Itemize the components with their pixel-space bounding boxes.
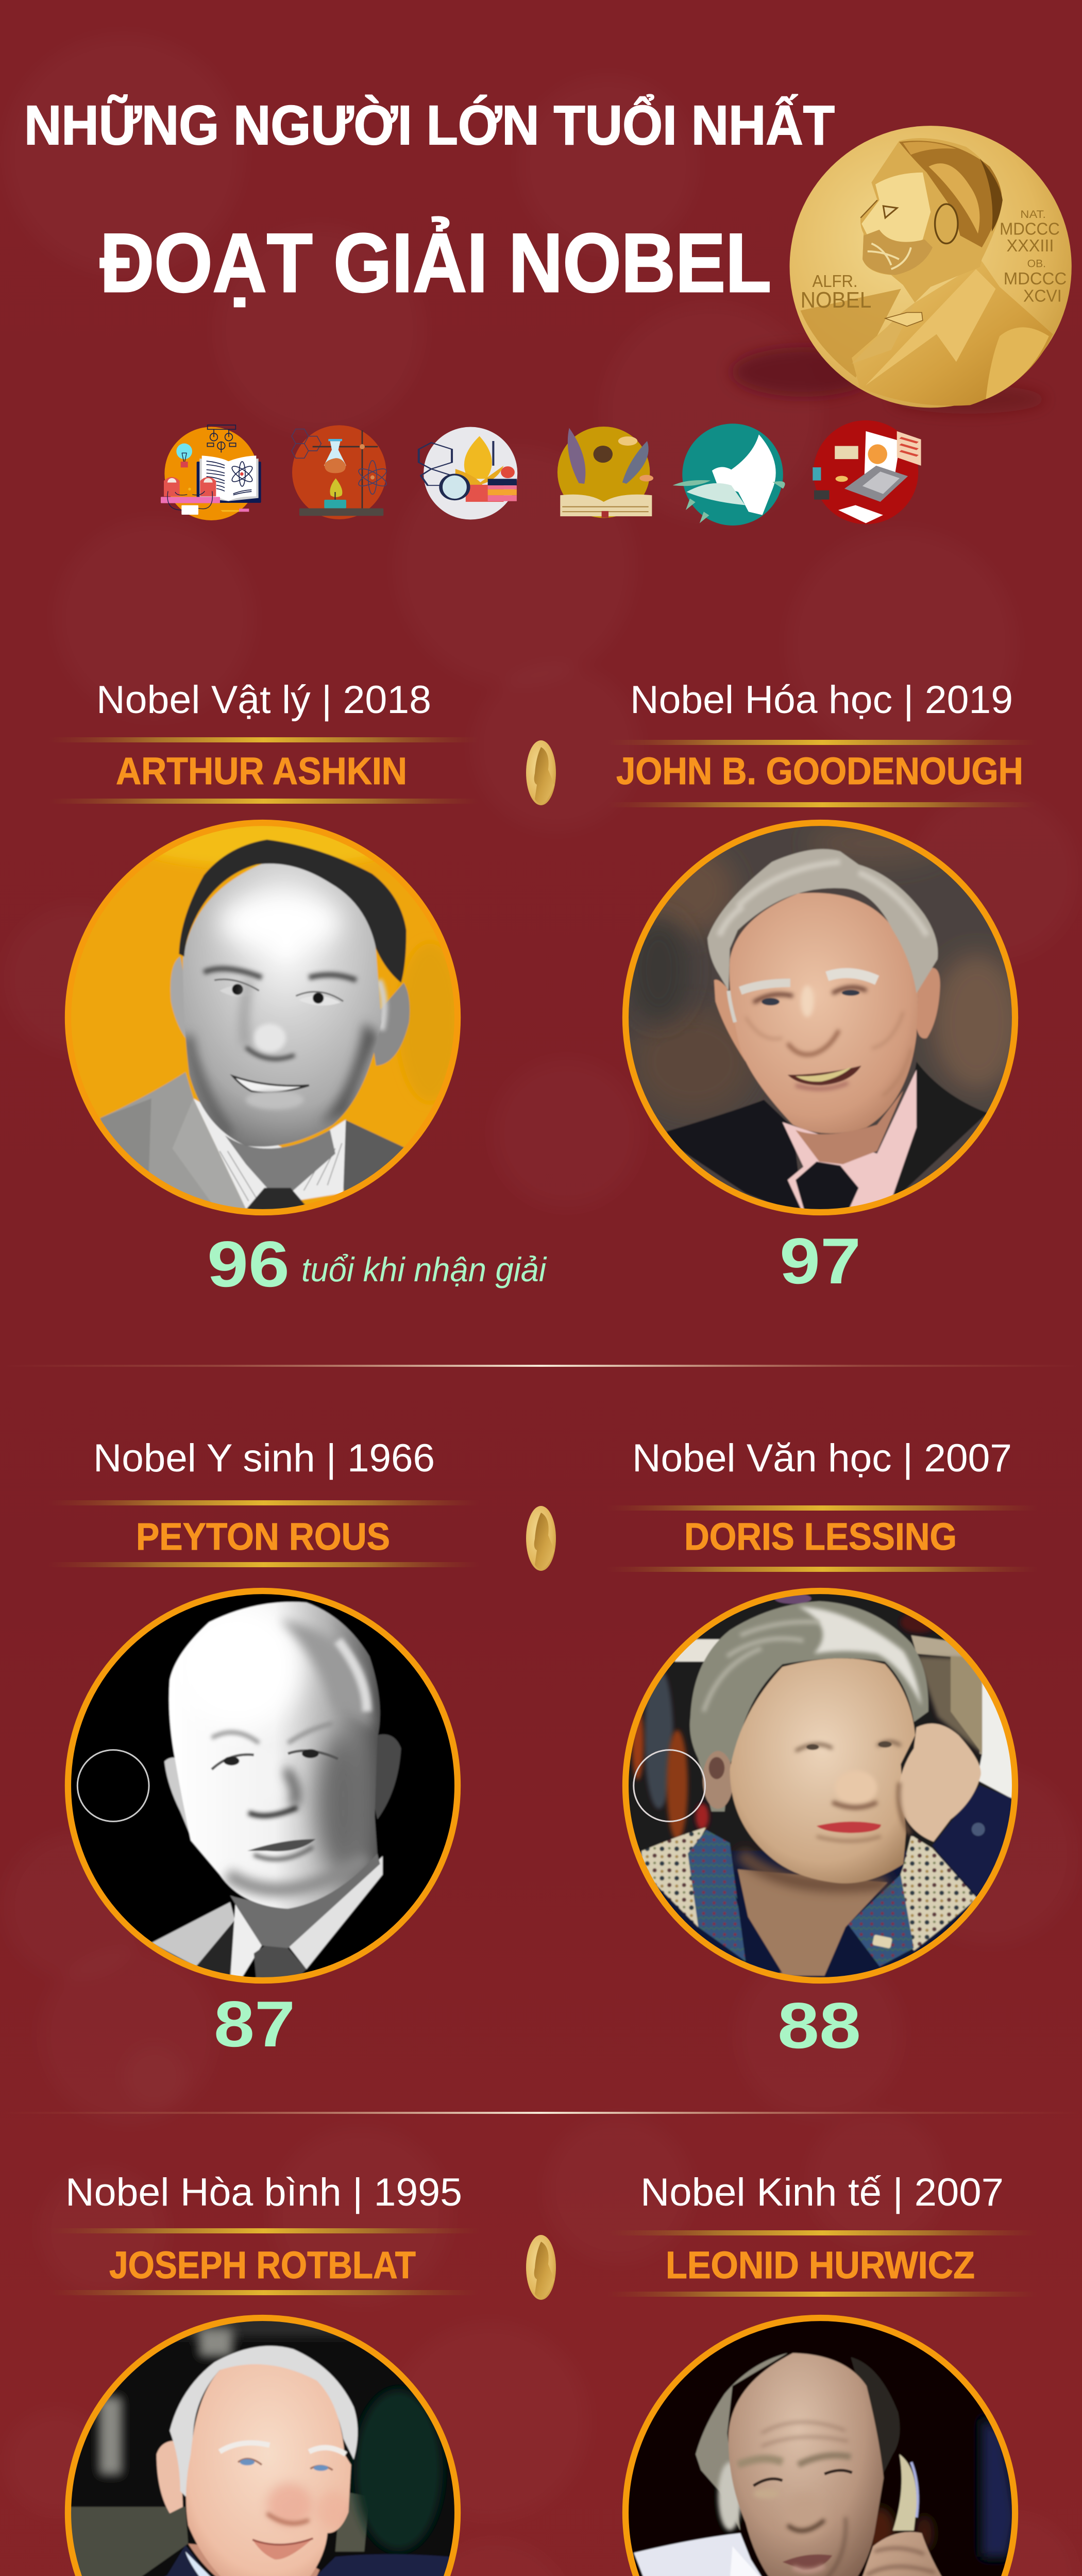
icon: large gold Nobel medal: ALFR. bbox=[813, 272, 858, 291]
icon: large gold Nobel medal: XCVI bbox=[1023, 286, 1062, 306]
category heading: Nobel Y sinh | 1966 bbox=[93, 1436, 435, 1480]
icons row: six Nobel categories bbox=[161, 420, 921, 526]
laureate name: LEONID HURWICZ bbox=[666, 2244, 975, 2286]
title line 2: ĐOẠT GIẢI NOBEL bbox=[100, 216, 771, 310]
icon: economics bbox=[813, 420, 921, 524]
age 96 with caption: tuổi khi nhận giải bbox=[301, 1250, 547, 1289]
age 97: 97 bbox=[780, 1225, 861, 1297]
icon: large gold Nobel medal: NAT. bbox=[1020, 209, 1046, 221]
icon: literature bbox=[557, 427, 653, 518]
laureate name: DORIS LESSING bbox=[684, 1515, 957, 1558]
icon: large gold Nobel medal bbox=[732, 126, 1072, 414]
icon: small medal row 3 bbox=[526, 2235, 556, 2300]
panel: Doris Lessing bbox=[607, 1436, 1038, 2062]
portrait bbox=[62, 1585, 464, 1987]
category heading: Nobel Kinh tế | 2007 bbox=[640, 2171, 1004, 2214]
portrait bbox=[619, 1585, 1021, 1987]
age 96 with caption: 96 bbox=[207, 1228, 290, 1300]
category heading: Nobel Hòa bình | 1995 bbox=[65, 2171, 462, 2214]
icon: large gold Nobel medal: NOBEL bbox=[801, 287, 871, 313]
panel: John B. Goodenough bbox=[607, 678, 1038, 1297]
laureate name: JOSEPH ROTBLAT bbox=[109, 2244, 416, 2286]
panel: Arthur Ashkin bbox=[48, 678, 547, 1300]
age 87: 87 bbox=[214, 1988, 295, 2060]
portrait bbox=[619, 817, 1022, 1219]
icon: small medal row 2 bbox=[526, 1506, 556, 1571]
decorative ring bbox=[634, 1750, 705, 1821]
age 88: 88 bbox=[777, 1989, 861, 2062]
icon: large gold Nobel medal: XXXIII bbox=[1006, 236, 1054, 256]
icon: peace dove bbox=[673, 423, 785, 526]
laureate name: PEYTON ROUS bbox=[136, 1515, 390, 1558]
category heading: Nobel Vật lý | 2018 bbox=[96, 678, 431, 722]
decorative ring bbox=[77, 1750, 149, 1821]
age 96 with caption bbox=[207, 1228, 547, 1300]
icon: medicine bbox=[419, 427, 517, 520]
panel: Joseph Rotblat bbox=[48, 2171, 479, 2576]
icon: chemistry bbox=[292, 425, 388, 519]
icon: large gold Nobel medal: MDCCC bbox=[1000, 219, 1060, 239]
icon: large gold Nobel medal: MDCCC bbox=[1004, 269, 1067, 289]
portrait bbox=[62, 817, 464, 1224]
portrait bbox=[619, 2312, 1021, 2576]
title bbox=[24, 94, 835, 310]
laureate name: ARTHUR ASHKIN bbox=[116, 750, 407, 792]
laureate name: JOHN B. GOODENOUGH bbox=[616, 750, 1023, 792]
icon: large gold Nobel medal: OB. bbox=[1027, 258, 1046, 270]
panel: Leonid Hurwicz bbox=[607, 2171, 1038, 2576]
category heading: Nobel Văn học | 2007 bbox=[632, 1436, 1012, 1480]
icon: small medal row 1 bbox=[526, 740, 556, 805]
category heading: Nobel Hóa học | 2019 bbox=[630, 678, 1013, 722]
title line 1: NHỮNG NGƯỜI LỚN TUỔI NHẤT bbox=[24, 94, 835, 156]
icon: physics bbox=[161, 425, 261, 520]
panel: Peyton Rous bbox=[48, 1436, 479, 2060]
portrait bbox=[62, 2312, 464, 2576]
